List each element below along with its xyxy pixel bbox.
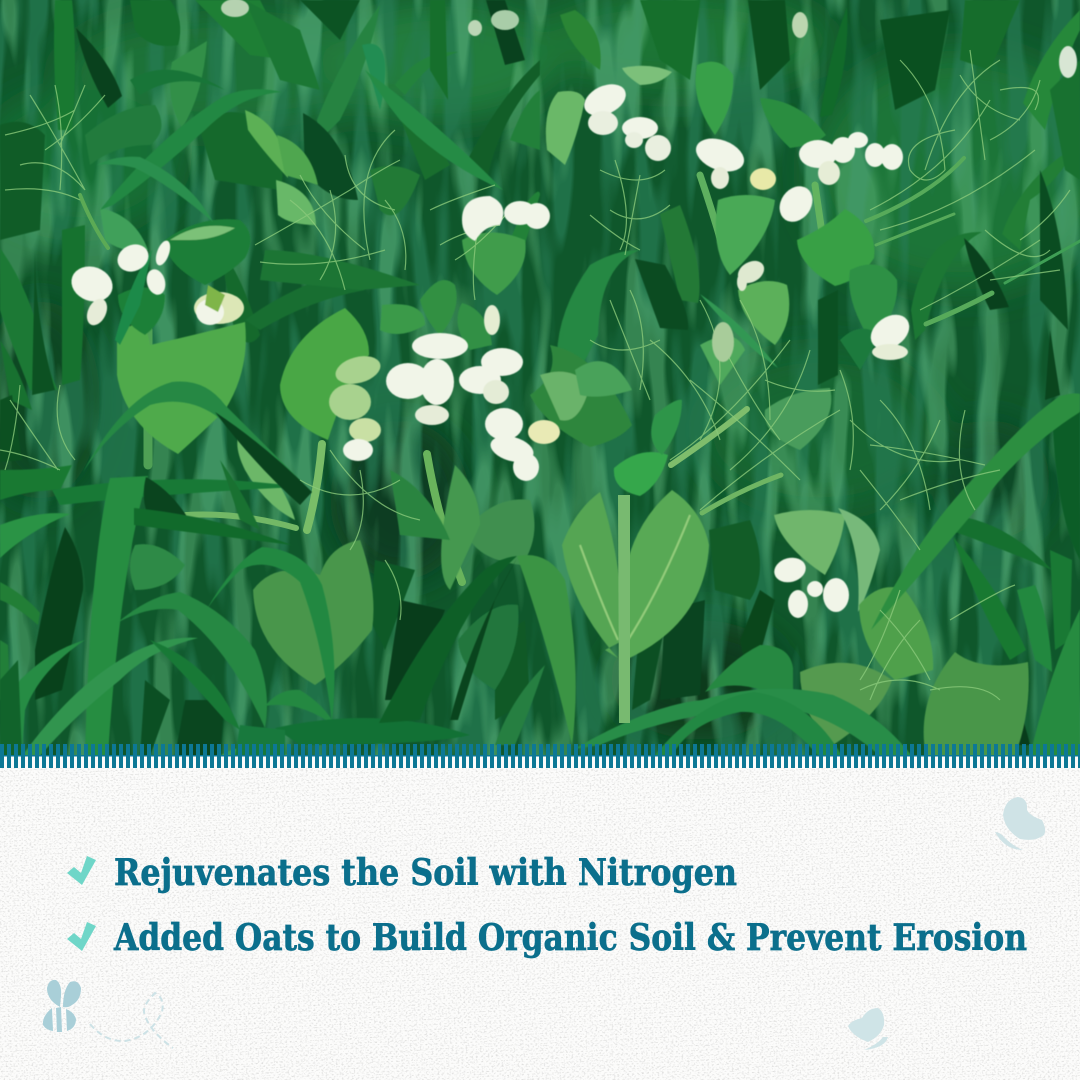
bullet 2: Added Oats [67,917,1027,959]
leaf: left large [117,322,246,454]
icon: check mark 2 [67,922,96,951]
leaf: bottom right [924,652,1029,756]
flower: far left pair [66,239,244,328]
flower: centre [485,408,560,481]
pale tendril nets [0,50,1070,700]
icon: butterfly top right [995,797,1045,850]
text: bullet one: Rejuvenates the Soil with Nitrogen [114,852,737,894]
flower: lower right [771,554,849,618]
background tonal patches [0,0,1080,740]
grass blades back layer [0,0,1080,756]
flower: top centre [462,196,550,241]
leaf: right lower pale [774,508,880,612]
stripe band: teal ticking [0,744,1080,768]
bullet 1: Rejuvenates the Soil with Nitrogen [67,852,737,894]
panel: fabric background [0,756,1080,1080]
thick stems [80,158,1080,582]
icon: check mark 1 [67,856,96,885]
leaf: central large pair [562,490,709,661]
grass blades front layer [0,70,1080,756]
flower: top far blooms [221,0,1077,78]
leaf: lower left [253,540,374,685]
leaf: upper right round [797,209,874,286]
photo: pea and oat cover crop field [0,0,1080,756]
central stem [618,495,630,723]
icon: butterfly bottom right [848,1008,888,1050]
flower: dim centre right [712,322,734,362]
leaf: bottom mid right [800,663,892,747]
leaf: dark cluster left [165,219,250,285]
flower: left of centre buds [329,351,384,461]
pea leaves [100,62,1029,756]
flower: centre left [386,305,523,425]
leaf: centre dark [530,345,632,447]
flower: right [864,308,916,360]
flower: top right group [691,132,903,291]
bullet list [67,852,1027,959]
flower: top cluster [579,78,671,161]
leaf: right stacked [859,587,933,680]
streak texture [0,0,1080,756]
icon: bee with dashed trail [43,980,173,1048]
white pea flowers [66,0,1077,618]
leaf: left centre [280,308,369,440]
leaf: upper centre [546,91,585,165]
